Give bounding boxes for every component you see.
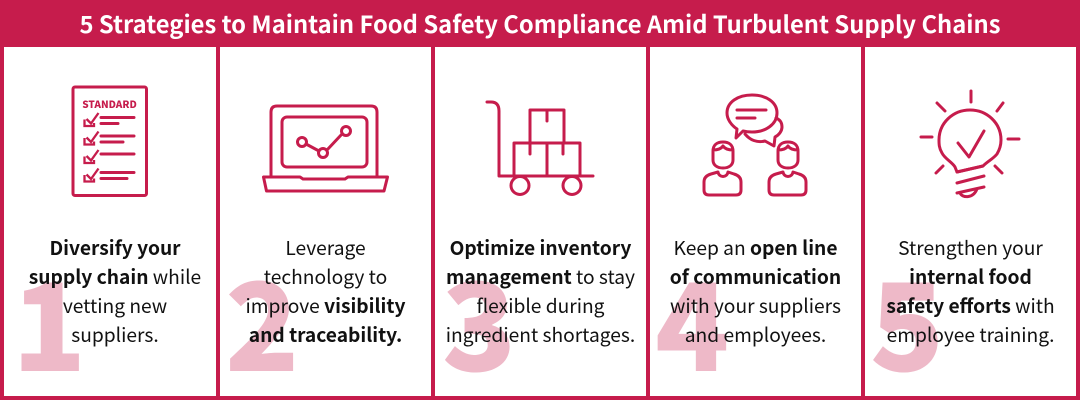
title xyxy=(0,0,1080,47)
title: 5 Strategies to Maintain Food Safety Compliance Amid Turbulent Supply Chains xyxy=(80,5,1000,40)
text: leverage: improve visibility xyxy=(246,290,405,318)
icon: standard checklist xyxy=(72,86,148,197)
text: keep open line: and employees. xyxy=(685,320,826,348)
text: leverage: and traceability. xyxy=(249,320,402,348)
text: optimize: Optimize inventory xyxy=(450,232,631,260)
text: keep open line xyxy=(670,232,841,348)
icon: hand truck with boxes xyxy=(486,100,594,196)
text: keep open line: Keep an open line xyxy=(673,232,838,260)
text: strengthen: employee training. xyxy=(887,320,1054,348)
text: diversify xyxy=(29,232,201,348)
icon: two people talking xyxy=(702,94,808,196)
text: strengthen: Strengthen your xyxy=(898,232,1043,260)
text: keep open line: with your suppliers xyxy=(670,290,841,318)
text: strengthen: safety efforts with xyxy=(886,290,1055,318)
icon: laptop with chart xyxy=(262,104,389,192)
text: strengthen: internal food xyxy=(909,262,1032,290)
text: diversify: supply chain while xyxy=(29,262,201,290)
text: diversify: suppliers. xyxy=(71,320,159,348)
text: leverage: technology to xyxy=(264,262,387,290)
icon: lightbulb with check xyxy=(920,90,1020,198)
icon: standard checklist: STANDARD xyxy=(82,96,137,111)
panel: diversify supply chain xyxy=(12,86,201,400)
text: diversify: vetting new xyxy=(63,290,167,318)
text: strengthen xyxy=(886,232,1055,348)
text: keep open line: of communication xyxy=(670,262,841,290)
panel: optimize inventory xyxy=(442,100,635,400)
panel: open communication xyxy=(655,94,841,400)
text: optimize: management to stay xyxy=(446,262,635,290)
text: diversify: Diversify your xyxy=(49,232,181,260)
text: leverage: Leverage xyxy=(285,232,366,260)
text: optimize: flexible during xyxy=(476,290,605,318)
text: optimize: ingredient shortages. xyxy=(446,320,635,348)
text: optimize xyxy=(446,232,635,348)
panel: food safety efforts xyxy=(870,90,1055,400)
text: leverage xyxy=(246,232,406,348)
panel: leverage technology xyxy=(225,104,406,400)
